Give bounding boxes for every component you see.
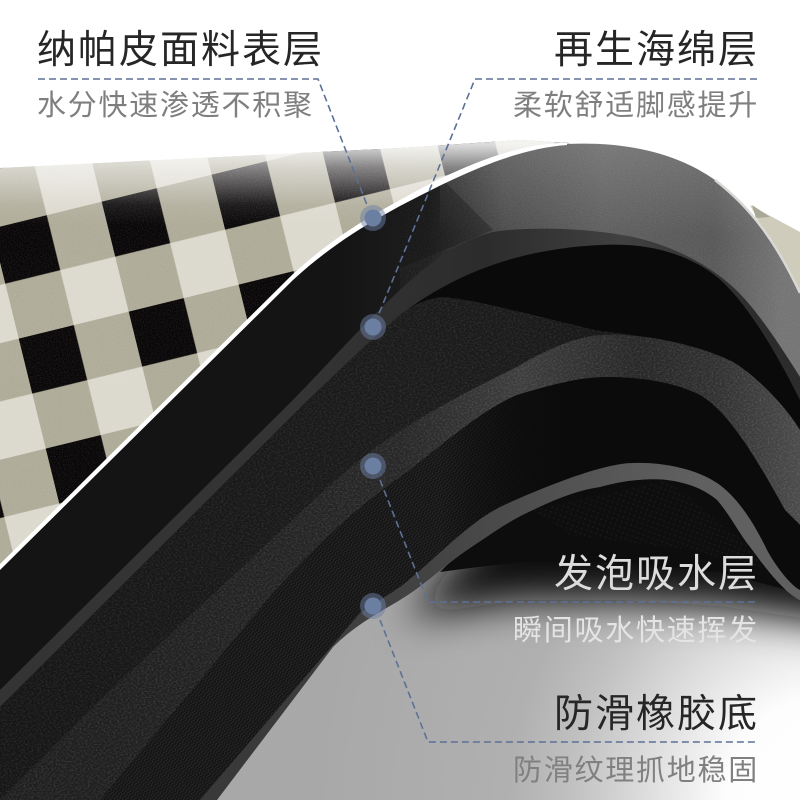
foam absorbent layer, top surface [0,297,636,800]
marker: foam [360,453,386,479]
floor background with shadow [217,450,800,800]
dashed leader: sponge [378,79,757,316]
rubber underside shadow [405,450,800,626]
text: soft and comfortable: 柔软舒适脚感提升 [513,89,759,122]
gingham corner on the right [750,205,800,300]
white top edge of the leather layer [0,143,567,570]
dashed leader: nappa leather [38,79,367,205]
dark gap below the sheet [0,245,800,800]
dashed leader: foam [380,480,757,602]
foam absorbent layer, lit cut face [0,330,800,800]
heading: nappa leather surface: 纳帕皮面料表层 [37,29,324,72]
marker: sponge [360,314,386,340]
marker: nappa leather [360,205,386,231]
marker: rubber [360,593,386,619]
text: anti-slip texture: 防滑纹理抓地稳固 [513,754,759,787]
sponge sheet cut edge [0,229,800,800]
text: instant absorption: 瞬间吸水快速挥发 [513,614,759,647]
heading: recycled sponge: 再生海绵层 [554,29,759,72]
heading: anti-slip rubber base: 防滑橡胶底 [554,693,759,736]
panel: gingham nappa leather surface [0,130,800,580]
rubber base cut edge [200,463,800,800]
dashed leader: rubber [380,620,757,742]
mesh layer underside [100,377,800,800]
solid black underside [440,479,786,590]
heading: foam absorbent layer: 发泡吸水层 [554,553,759,596]
text: water penetrates quickly: 水分快速渗透不积聚 [37,89,314,122]
